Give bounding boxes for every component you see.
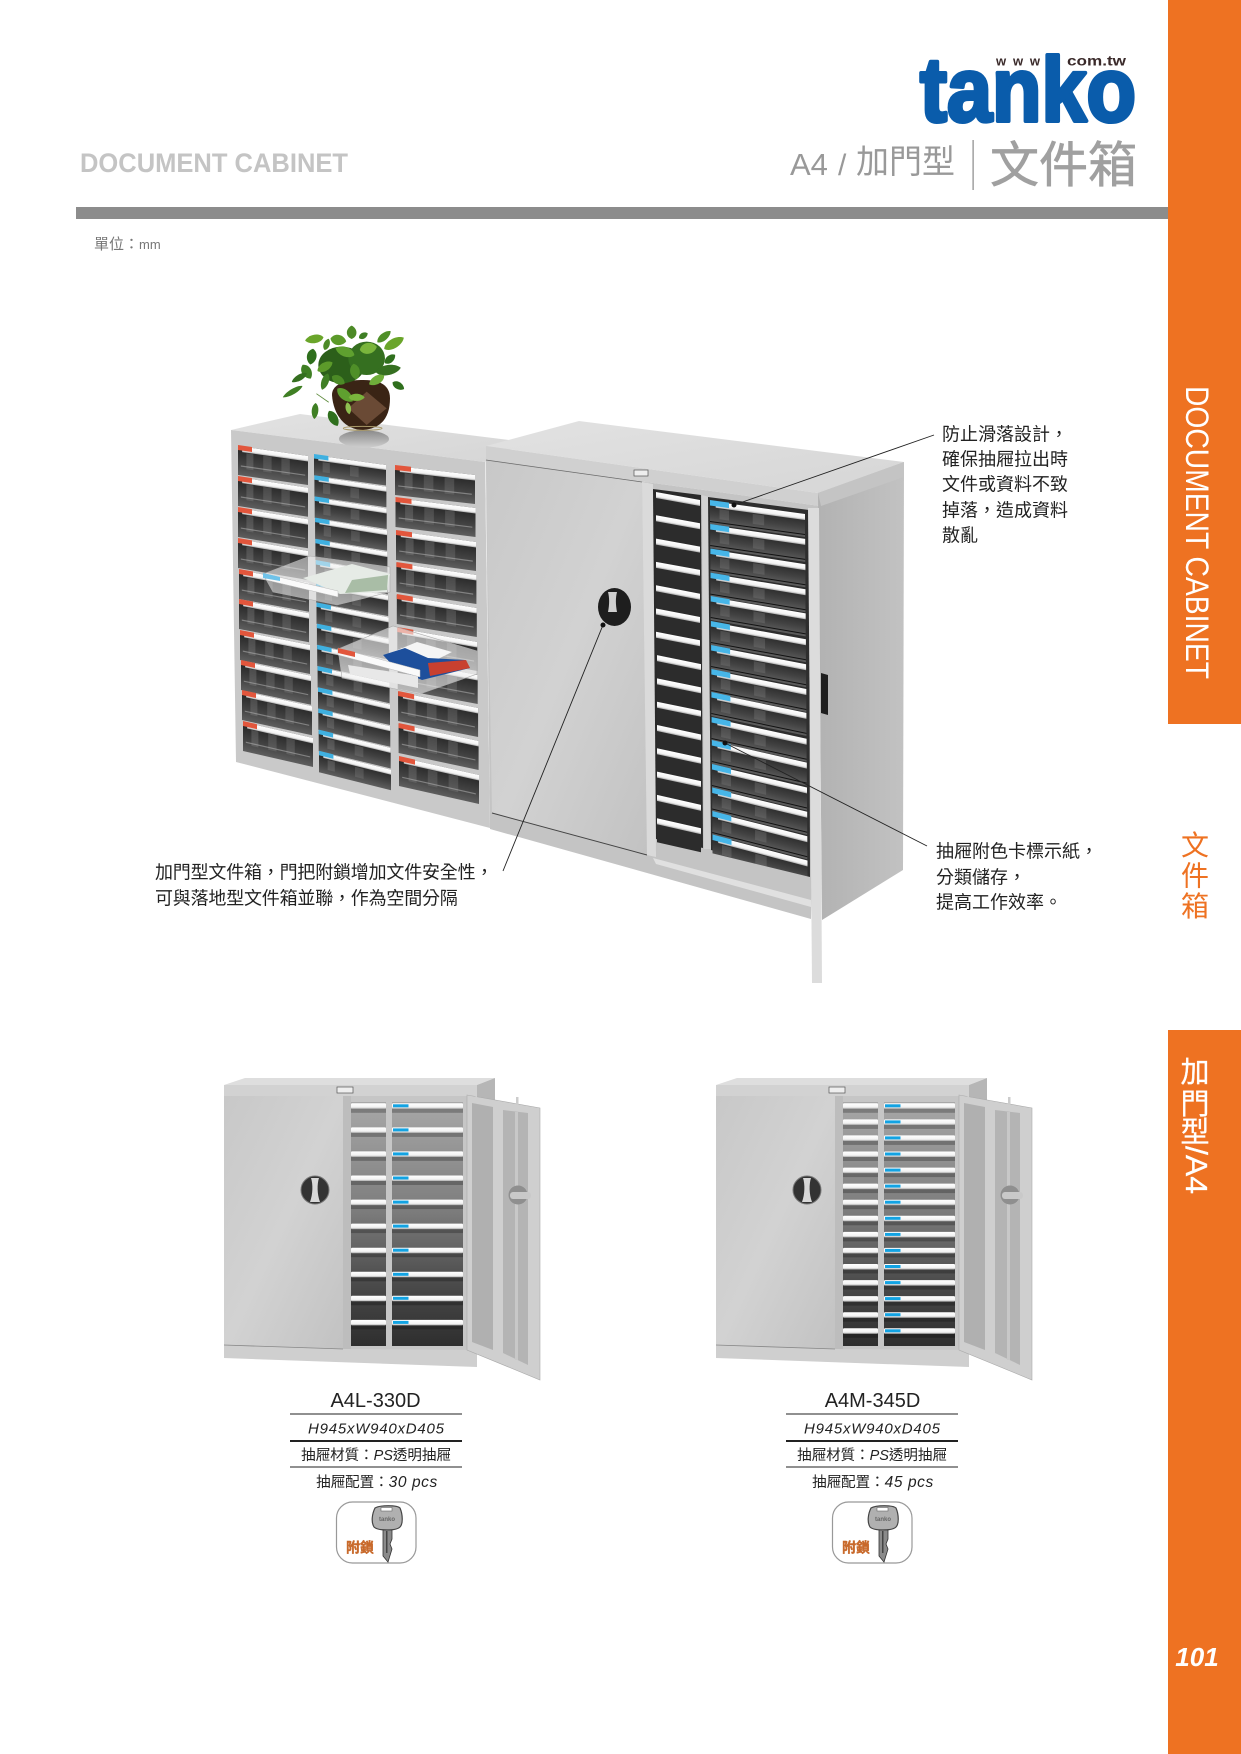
callout: anti-slip design: 散亂 [942, 526, 978, 546]
sidebar text: 文件箱: 件 [1181, 860, 1209, 892]
icon: key A4L-330D: tanko [379, 1517, 395, 1523]
plant in pot [281, 326, 406, 448]
product illustration: A4M-345D [716, 1078, 1032, 1380]
callout: colour card: 提高工作效率。 [936, 892, 1062, 912]
header rule [76, 207, 1168, 219]
sidebar text: 加門型/A4 [1179, 1057, 1214, 1194]
sidebar text: 加門型/A4: /A4 [1179, 1146, 1214, 1194]
callout: door lock: 可與落地型文件箱並聯，作為空間分隔 [155, 888, 458, 908]
icon: key A4M-345D [832, 1502, 912, 1563]
callout: anti-slip design [942, 424, 1068, 546]
spec block: A4M-345D: 抽屜配置：45 pcs [812, 1474, 934, 1491]
callout: anti-slip design: 確保抽屜拉出時 [942, 450, 1068, 470]
right door edge [808, 508, 822, 983]
interior: narrow drawers [653, 489, 711, 852]
open drawer: lower [338, 626, 477, 694]
callout: door lock [155, 862, 493, 908]
callout: colour card [936, 842, 1098, 912]
callout: door lock: 加門型文件箱，門把附鎖增加文件安全性， [155, 862, 493, 882]
heading: document cabinet: DOCUMENT CABINET [80, 148, 348, 178]
leader line: colour card [722, 740, 927, 846]
logo: tanko: com.tw [1067, 54, 1127, 68]
door lock knob [598, 588, 631, 626]
spec block: A4M-345D: A4M-345D [825, 1390, 920, 1412]
icon: key A4L-330D: 附鎖 [346, 1540, 374, 1556]
sidebar text: 加門型/A4: 加 [1180, 1057, 1210, 1089]
sidebar text: 文件箱 [1181, 830, 1209, 922]
leader line: anti-slip design [732, 435, 934, 508]
icon: key A4L-330D [336, 1502, 416, 1563]
heading divider [972, 140, 974, 190]
sidebar text: document cabinet: DOCUMENT CABINET [1179, 386, 1215, 679]
spec block: A4M-345D [786, 1390, 958, 1491]
spec block: A4L-330D: 抽屜材質：PS透明抽屜 [301, 1446, 451, 1464]
photo: right cabinet with door [486, 421, 904, 983]
pot reflection [339, 430, 389, 448]
unit note: 單位：mm [94, 236, 161, 253]
logo: tanko: tanko [920, 40, 1136, 141]
leader line: door lock [503, 622, 606, 871]
product illustration: A4L-330D [224, 1078, 540, 1380]
drawers: left column [238, 445, 313, 767]
pot [332, 380, 390, 430]
interior: drawers with blue label cards [708, 497, 810, 884]
open drawer: upper [263, 556, 390, 605]
logo: tanko: www [995, 54, 1041, 68]
spec block: A4L-330D [290, 1390, 462, 1491]
heading: A4 / 加門型: / [838, 149, 847, 182]
sidebar text: 文件箱: 文 [1181, 830, 1209, 861]
drawers: right column [395, 465, 479, 804]
sidebar: top orange tab [1168, 0, 1241, 724]
sidebar: bottom orange tab [1168, 1030, 1241, 1754]
callout: anti-slip design: 防止滑落設計， [942, 424, 1068, 444]
sidebar text: 文件箱: 箱 [1181, 891, 1209, 922]
callout: colour card: 分類儲存， [936, 868, 1026, 888]
heading: A4 / 加門型 [790, 143, 955, 182]
spec block: A4L-330D: 抽屜配置：30 pcs [316, 1474, 438, 1491]
heading: 文件箱: 文件箱 [990, 139, 1137, 193]
photo: left open cabinet with drawers [231, 414, 525, 828]
icon: key A4M-345D: tanko [875, 1517, 891, 1523]
sidebar text: 加門型/A4: 型 [1180, 1116, 1210, 1149]
icon: key A4M-345D: 附鎖 [842, 1540, 870, 1556]
callout: anti-slip design: 文件或資料不致 [942, 474, 1068, 494]
right door handle [821, 673, 828, 715]
door left [486, 461, 647, 855]
page number: 101 [1175, 1642, 1219, 1672]
spec block: A4L-330D: A4L-330D [330, 1390, 421, 1412]
callout: colour card: 抽屜附色卡標示紙， [936, 842, 1098, 862]
spec block: A4M-345D: 抽屜材質：PS透明抽屜 [797, 1446, 947, 1464]
drawers: middle column [314, 454, 391, 790]
leaves [281, 326, 406, 428]
spec block: A4L-330D: H945xW940xD405 [308, 1420, 445, 1438]
heading: A4 / 加門型: 加門型 [856, 143, 955, 180]
callout: anti-slip design: 掉落，造成資料 [942, 500, 1068, 520]
sidebar text: 加門型/A4: 門 [1180, 1089, 1210, 1121]
heading: A4 / 加門型: A4 [790, 147, 828, 182]
spec block: A4M-345D: H945xW940xD405 [804, 1420, 941, 1438]
